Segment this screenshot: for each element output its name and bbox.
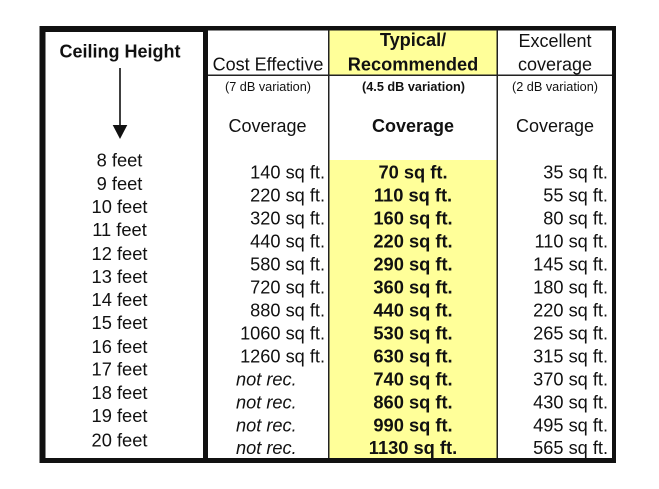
recommended values: 160 sq ft. <box>373 208 453 228</box>
excellent values: 35 sq ft. <box>543 162 608 182</box>
recommended values: 70 sq ft. <box>378 162 448 182</box>
excellent values: 565 sq ft. <box>533 438 608 458</box>
cost effective values: not rec. <box>236 438 297 458</box>
excellent values: 145 sq ft. <box>533 254 608 274</box>
recommended values: 1130 sq ft. <box>369 437 457 458</box>
excellent values: 55 sq ft. <box>543 186 608 206</box>
heading: excellent coverage: coverage <box>518 54 592 74</box>
heading: typical recommended: Recommended <box>348 54 478 74</box>
ceiling height values: 14 feet <box>92 289 147 310</box>
recommended values: 860 sq ft. <box>373 392 453 412</box>
cost effective values: 220 sq ft. <box>250 186 325 206</box>
table frame <box>40 26 616 463</box>
yellow recommended column background <box>329 30 497 458</box>
recommended values: 110 sq ft. <box>374 184 452 206</box>
excellent values: 265 sq ft. <box>533 324 608 344</box>
heading: cost effective: Cost Effective <box>213 54 323 74</box>
heading: excellent coverage: Excellent <box>518 31 592 51</box>
excellent values: 180 sq ft. <box>533 278 608 298</box>
note: 7 dB: (7 dB variation) <box>225 80 311 94</box>
recommended values: 740 sq ft. <box>373 368 453 390</box>
cost effective values: 1060 sq ft. <box>240 324 325 344</box>
excellent values: 495 sq ft. <box>533 416 608 436</box>
heading: typical recommended <box>348 30 478 74</box>
recommended values: 530 sq ft. <box>373 322 453 344</box>
ceiling height values: 17 feet <box>92 358 147 380</box>
cost effective values: 140 sq ft. <box>250 162 325 182</box>
recommended values: 990 sq ft. <box>373 414 453 436</box>
excellent values: 370 sq ft. <box>533 370 608 390</box>
excellent values: 220 sq ft. <box>533 300 608 320</box>
cost effective values: not rec. <box>236 370 297 390</box>
ceiling height values: 18 feet <box>92 382 147 403</box>
cost effective values: 440 sq ft. <box>250 232 325 252</box>
recommended values: 290 sq ft. <box>373 254 453 274</box>
note: 2 dB: (2 dB variation) <box>512 80 598 94</box>
ceiling height values: 8 feet <box>97 150 142 170</box>
recommended values: 360 sq ft. <box>373 276 453 298</box>
recommended values <box>369 162 457 458</box>
label: coverage: Coverage <box>228 116 307 136</box>
panel: cost effective column <box>213 54 325 458</box>
cost effective values: 880 sq ft. <box>250 300 325 320</box>
excellent values: 80 sq ft. <box>543 208 608 228</box>
label: coverage: Coverage <box>372 116 454 136</box>
cost effective values: 720 sq ft. <box>250 278 325 298</box>
ceiling height values <box>92 150 147 450</box>
excellent values: 315 sq ft. <box>533 346 608 366</box>
heading: typical recommended: Typical/ <box>380 30 446 50</box>
arrow: down <box>113 68 127 139</box>
excellent values: 110 sq ft. <box>535 232 608 252</box>
panel: ceiling height column <box>60 42 181 450</box>
ceiling height values: 15 feet <box>92 312 147 333</box>
ceiling height values: 10 feet <box>92 196 147 217</box>
cost effective values: 1260 sq ft. <box>240 346 325 366</box>
recommended values: 630 sq ft. <box>373 346 453 366</box>
note: 4.5 dB: (4.5 dB variation) <box>362 80 465 94</box>
recommended values: 440 sq ft. <box>373 300 453 320</box>
panel: typical recommended column <box>348 30 478 458</box>
heading: ceiling height: Ceiling Height <box>60 42 181 62</box>
ceiling height values: 20 feet <box>92 430 147 450</box>
ceiling height values: 19 feet <box>92 405 147 426</box>
cost effective values: not rec. <box>236 392 297 412</box>
cost effective values: 580 sq ft. <box>250 254 325 274</box>
ceiling height values: 12 feet <box>92 243 147 264</box>
excellent values: 430 sq ft. <box>533 392 608 412</box>
ceiling height values: 13 feet <box>92 266 147 287</box>
heading: excellent coverage <box>518 31 592 74</box>
cost effective values <box>236 162 325 458</box>
excellent values <box>533 162 608 458</box>
recommended values: 220 sq ft. <box>373 230 453 252</box>
label: coverage: Coverage <box>516 116 594 136</box>
cost effective values: not rec. <box>236 416 297 436</box>
panel: excellent coverage column <box>512 31 608 458</box>
ceiling height values: 16 feet <box>92 336 147 357</box>
ceiling height values: 9 feet <box>97 173 142 194</box>
ceiling height values: 11 feet <box>92 219 147 240</box>
cost effective values: 320 sq ft. <box>250 208 325 228</box>
